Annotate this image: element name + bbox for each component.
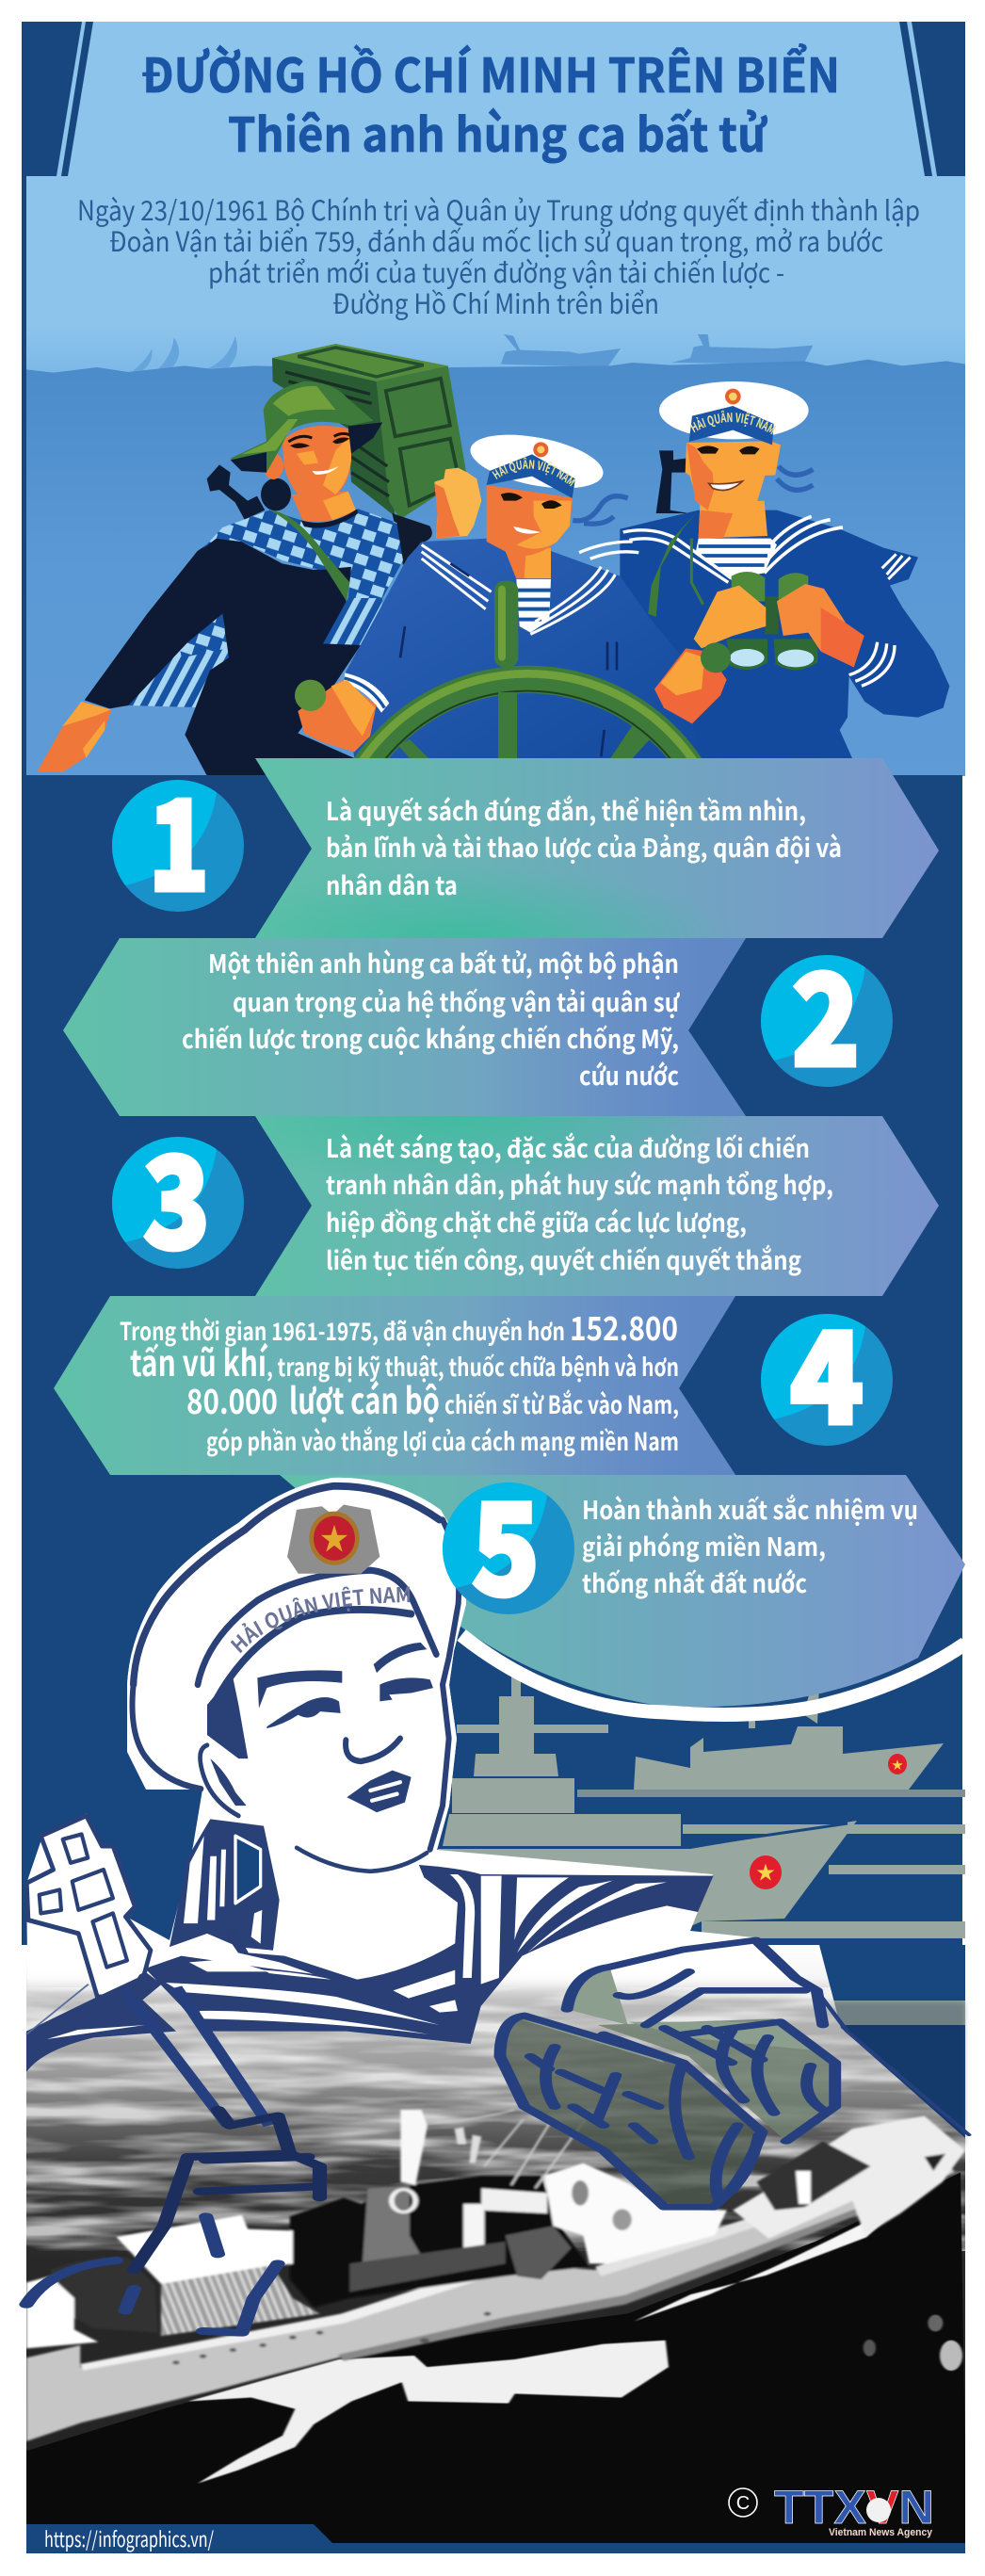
footer bar [26,2523,965,2553]
woman hat [231,381,382,473]
woman body [85,539,361,777]
sailor rifle [26,1816,151,1997]
strap buckle lines over photo [26,2110,320,2333]
number 3 [112,1137,244,1269]
arrow 5 text [582,1490,918,1600]
arrow 4: góp phần vào thắng lợi của cách mạng miền Nam [206,1423,679,1458]
logo: TTXVN: TTXVN [774,2481,934,2534]
ammunition crate [272,344,467,520]
arrow 5 [280,1475,965,1714]
woman pointing hand [38,702,111,772]
arrow 2: Một thiên anh hùng ca bất tử, một bộ phận [208,944,679,980]
arrow 1 [255,758,939,938]
ship emblems: ★ [892,1757,903,1773]
sailor neck and collar [170,1819,280,1951]
grunge on navy near photo edge [822,2001,965,2147]
number 2 [761,955,893,1087]
intro paragraph: phát triển mới của tuyến đường vận tải chiến lược - [208,251,784,291]
right sailor strap [648,511,697,617]
right sailor head [659,381,809,513]
number 2: 2 [792,919,860,1102]
front warship [438,1672,965,2025]
header corner: right [899,22,965,176]
white curved edge [461,1635,965,1714]
binoculars over photo [500,1940,969,2207]
arrow 3: liên tục tiến công, quyết chiến quyết thắng [326,1240,801,1277]
woman pack shadow [392,513,432,565]
ship emblems: ★ [756,1857,775,1885]
right sailor rifle [656,450,689,513]
number 5 [425,1449,574,1631]
arrow 4: chiến sĩ từ Bắc vào Nam, [444,1386,679,1421]
intro paragraph: Đoàn Vận tải biển 759, đánh dấu mốc lịch sử quan trọng, mở ra bước [109,220,883,260]
sailor face [207,1643,433,1812]
distant warships [501,334,813,367]
woman rifle [207,464,265,520]
woman head [264,426,351,499]
dark water [26,2173,967,2554]
sailboats [132,336,237,372]
arrow 2: cứu nước [579,1056,679,1093]
centre sailor cap [471,435,603,488]
arrow 3: Là nét sáng tạo, đặc sắc của đường lối chiến [326,1128,810,1165]
arrow 3 [255,1116,939,1296]
sailor cap emblem: ★ [320,1515,348,1559]
ship emblems [750,1754,907,1889]
photo: ship at sea [26,1945,967,2554]
rear warship [577,1686,965,1797]
sailor cap emblem [287,1504,379,1574]
arrow 1: bản lĩnh và tài thao lược của Đảng, quân đội và [326,828,842,865]
panel: header [22,22,965,775]
right sailor head: HẢI QUÂN VIỆT NAM [689,411,776,435]
woman scarf [202,509,403,646]
intro paragraph: Đường Hồ Chí Minh trên biển [332,283,659,322]
arrow 5 text: giải phóng miền Nam, [582,1527,826,1563]
arrow 4: 152.800 [570,1303,678,1351]
centre sailor body [344,539,699,758]
arrow 4: 80.000 [186,1375,278,1424]
woman strap [273,510,349,601]
centre sailor head [471,435,603,556]
raised hand on crate [434,468,481,539]
title [141,39,840,166]
intro paragraph [77,189,920,322]
woman neck [292,492,356,522]
arrow 4 [54,1296,735,1475]
arrow 3: tranh nhân dân, phát huy sức mạnh tổng hợp, [326,1165,833,1202]
number 1: 1 [149,747,209,927]
centre sailor neck [506,548,551,578]
hero illustration [26,332,965,776]
ship portholes [172,2312,491,2364]
sailor cap outlines [133,1486,459,1850]
number 5: 5 [472,1449,540,1631]
arrow 4: lượt cán bộ [289,1372,440,1424]
sailor line-art portrait [19,1477,972,2337]
woman hair [261,478,291,510]
binoculars [727,572,817,670]
arrow 2: quan trọng của hệ thống vận tải quân sự [233,982,681,1019]
sailor white silhouette [26,1478,819,2025]
centre sailor right hand [654,642,731,723]
right sailor neck [699,501,767,539]
number 3: 3 [143,1102,210,1285]
panel: dark background [22,775,965,2157]
footer url: https://infographics.vn/ [44,2523,214,2553]
arrow 1: nhân dân ta [326,866,458,902]
sailor strap over photo [124,1987,269,2126]
title: ĐƯỜNG HỒ CHÍ MINH TRÊN BIỂN [141,39,840,106]
sea [22,360,965,777]
centre sailor head: HẢI QUÂN VIỆT NAM [492,458,576,486]
right sailor cap [659,381,809,439]
number 4: 4 [790,1277,864,1460]
arrow 5 text: Hoàn thành xuất sắc nhiệm vụ [582,1490,918,1527]
ship wheel [354,580,702,758]
sailor cap text: HẢI QUÂN VIỆT NAM [230,1586,411,1654]
arrow 4: , trang bị kỹ thuật, thuốc chữa bệnh và hơn [266,1349,679,1384]
centre sailor left hand [295,680,377,752]
arrow 1: Là quyết sách đúng đắn, thể hiện tầm nhìn, [326,791,806,828]
arrow 2 [63,938,746,1116]
hat ribbons [573,466,813,524]
arrow 4: tấn vũ khí [130,1335,268,1386]
right sailor hands [694,584,864,667]
title: Thiên anh hùng ca bất tử [228,98,767,166]
header corner: left [22,22,93,176]
ship hull [26,2150,954,2441]
woman left scarf tail [128,614,230,707]
arrow 3: hiệp đồng chặt chẽ giữa các lực lượng, [326,1203,747,1239]
arrow 5 text: thống nhất đất nước [582,1563,807,1600]
warships [438,1672,965,2025]
white collar stripes [47,1874,667,2039]
foam [188,2341,669,2484]
right sailor body [579,510,949,758]
number 4 [761,1314,893,1446]
logo: TTXVN: Vietnam News Agency [829,2527,933,2538]
number 1 [112,780,244,912]
arrow 2: chiến lược trong cuộc kháng chiến chống Mỹ, [182,1019,679,1056]
logo: TTXVN: C [736,2493,750,2514]
sailor collar and shirt [26,1865,714,2072]
ship superstructure [290,2176,589,2308]
arrow 4: Trong thời gian 1961-1975, đã vận chuyển hơn [120,1313,565,1348]
